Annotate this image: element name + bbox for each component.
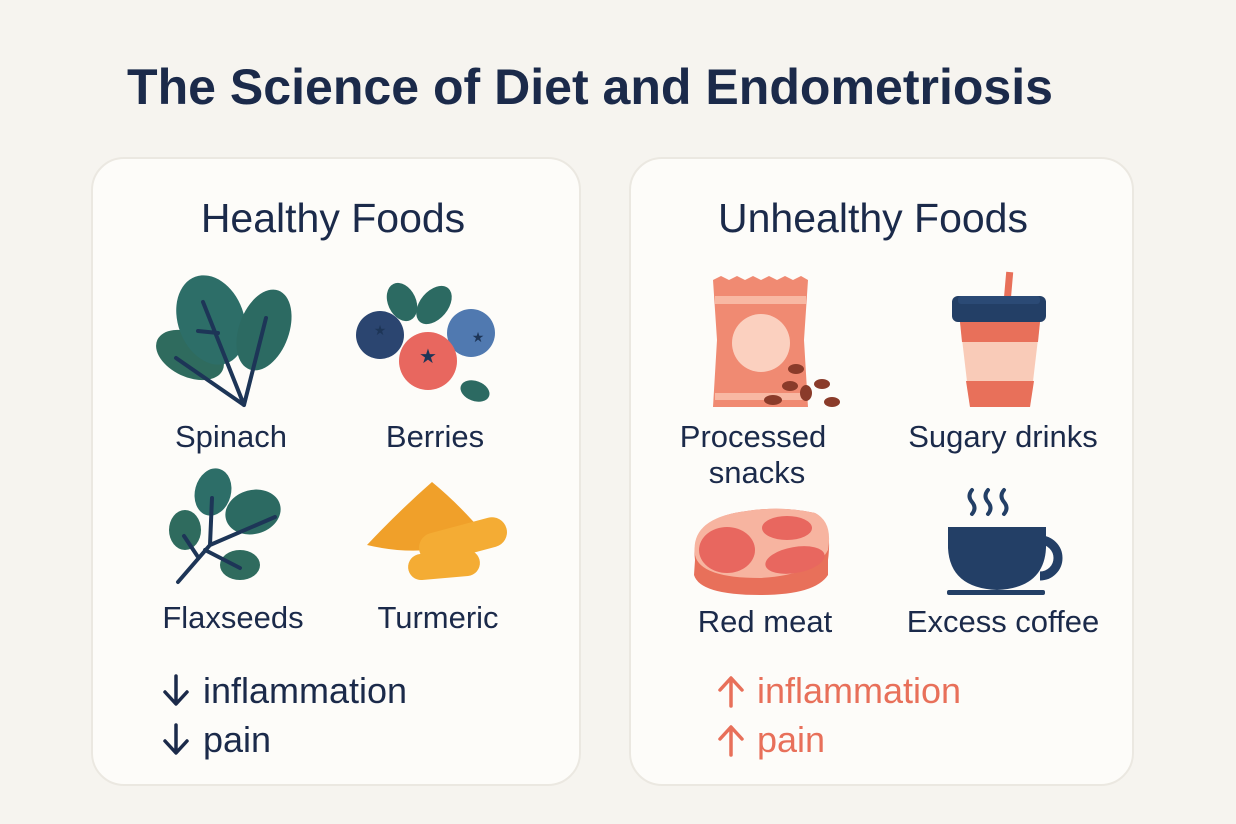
icon: snack bag	[713, 276, 840, 407]
label: processed snacks	[680, 419, 826, 490]
label: processed snacks: Processed	[680, 419, 826, 454]
icon: berries	[356, 278, 495, 406]
label: sugary drinks: Sugary drinks	[908, 419, 1098, 454]
label: excess coffee: Excess coffee	[907, 604, 1099, 639]
label: spinach: Spinach	[175, 419, 287, 454]
heading: healthy foods: Healthy Foods	[201, 195, 465, 241]
panel: unhealthy foods	[630, 158, 1133, 785]
label: turmeric: Turmeric	[377, 600, 499, 635]
icon: turmeric	[367, 482, 510, 581]
icon: sugary drink	[952, 272, 1046, 407]
effect: less inflammation: inflammation	[203, 670, 407, 711]
effect: less pain	[165, 719, 271, 760]
effect: less pain: pain	[203, 719, 271, 760]
icon: flaxseeds	[169, 464, 286, 582]
icon: berries: ★	[472, 329, 484, 345]
effect: more inflammation: inflammation	[757, 670, 961, 711]
effect: more pain: pain	[757, 719, 825, 760]
effect: more pain	[720, 719, 825, 760]
heading: unhealthy foods: Unhealthy Foods	[718, 195, 1028, 241]
panel: healthy foods	[92, 158, 580, 785]
icon: berries: ★	[374, 322, 386, 338]
label: red meat: Red meat	[698, 604, 833, 639]
icon: red meat	[694, 509, 829, 595]
label: flaxseeds: Flaxseeds	[162, 600, 304, 635]
label: berries: Berries	[386, 419, 484, 454]
icon: coffee cup	[947, 490, 1058, 595]
title: The Science of Diet and Endometriosis	[127, 59, 1053, 115]
label: processed snacks: snacks	[709, 455, 805, 490]
icon: spinach	[148, 265, 302, 405]
icon: berries: ★	[419, 346, 437, 368]
